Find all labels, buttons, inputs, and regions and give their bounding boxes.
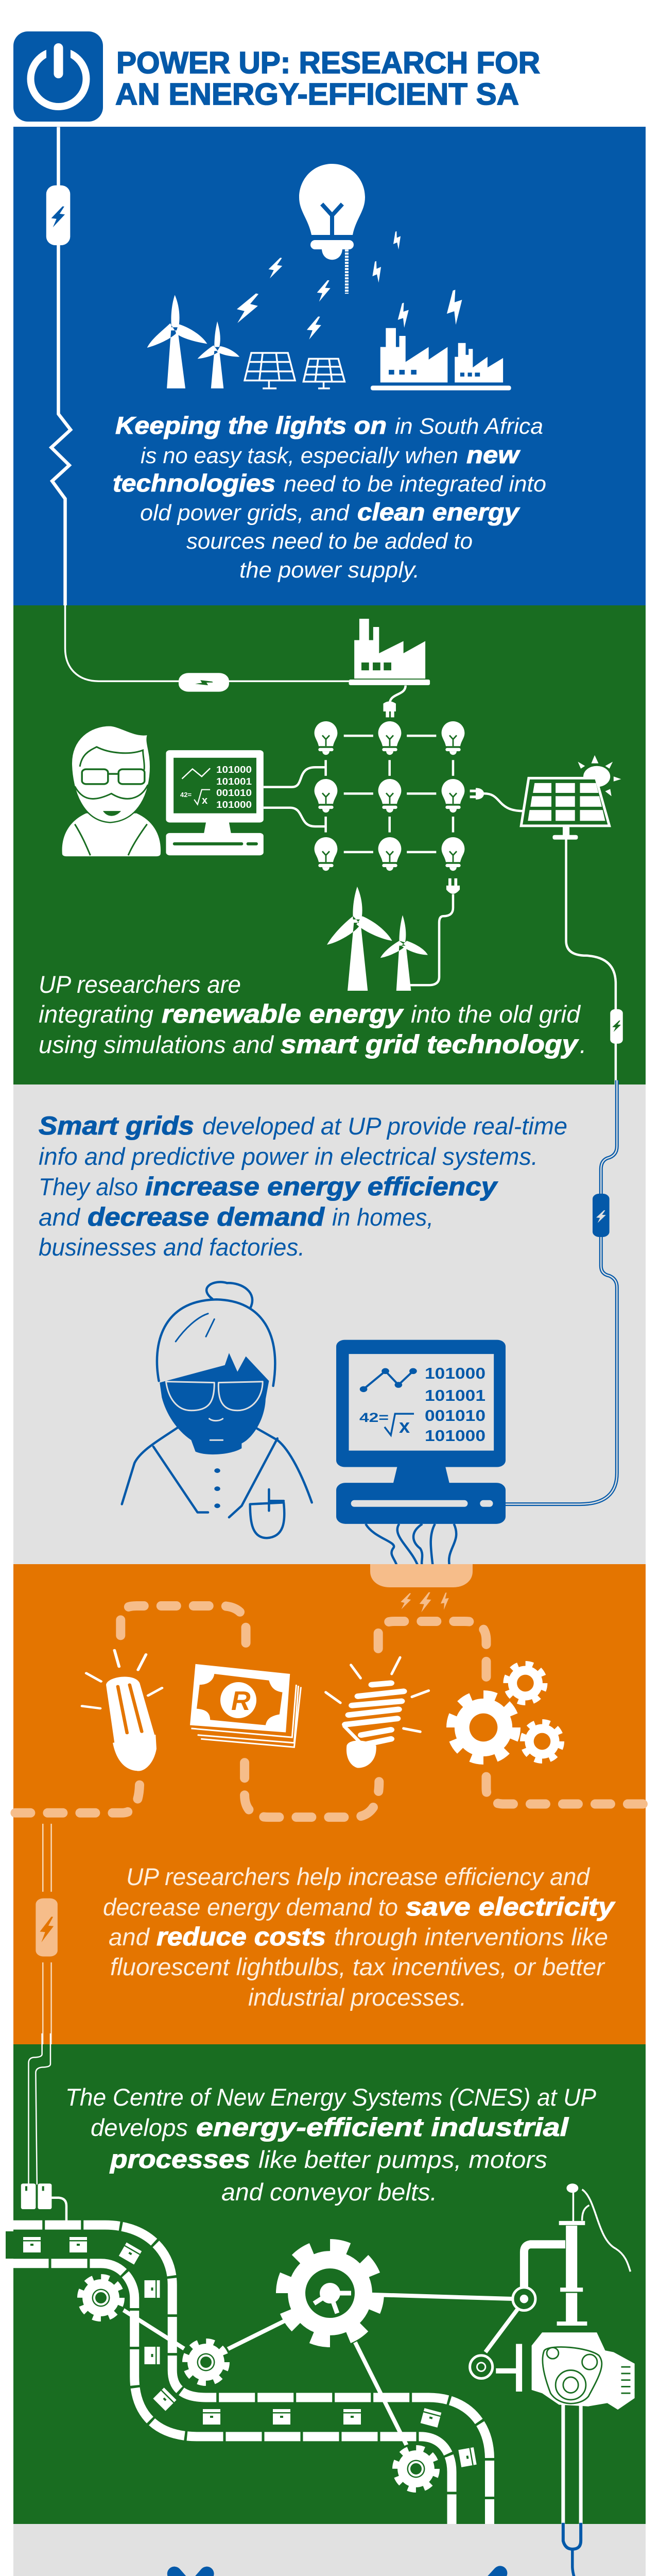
icon: woman researcher bbox=[122, 1282, 312, 1538]
title bbox=[115, 46, 540, 111]
text: smart grids: decrease demand bbox=[88, 1202, 325, 1231]
text: renewable energy: using simulations and bbox=[39, 1031, 274, 1058]
icon: energy sources feeding a lightbulb bbox=[147, 164, 511, 391]
computer screen readout bbox=[359, 1364, 485, 1445]
text: smart grids: in homes, bbox=[332, 1204, 433, 1231]
solar panels bbox=[245, 353, 344, 388]
icon: socket with sparks bbox=[370, 1564, 473, 1613]
text: smart grids: developed at UP provide real-time bbox=[202, 1112, 567, 1140]
text: keeping the lights on: need to be integrated into bbox=[284, 471, 546, 497]
icon: researcher bbox=[62, 725, 161, 856]
computer screen readout: 101001 bbox=[216, 776, 252, 787]
text: save electricity: through interventions like bbox=[334, 1923, 608, 1951]
text: industrial processes: The Centre of New Energy Systems (CNES) at UP bbox=[65, 2083, 597, 2111]
text: renewable energy: into the old grid bbox=[411, 1001, 581, 1028]
panel: efficient buildings bbox=[13, 2523, 646, 2576]
text: industrial processes: and conveyor belts. bbox=[221, 2178, 437, 2206]
icon: computer with wires bbox=[336, 1340, 506, 1567]
icon: cross bbox=[175, 2574, 207, 2576]
text: save electricity: industrial processes. bbox=[248, 1984, 466, 2011]
cable and plugs bbox=[21, 2033, 66, 2223]
panel: industrial processes bbox=[6, 2033, 646, 2527]
text: renewable energy: renewable energy bbox=[162, 999, 404, 1028]
text: renewable energy bbox=[39, 971, 586, 1059]
cable to factory bbox=[65, 601, 351, 681]
header bbox=[13, 31, 540, 122]
text: save electricity: reduce costs bbox=[157, 1922, 326, 1951]
computer screen readout: 42= bbox=[359, 1411, 389, 1425]
conveyor belt bbox=[6, 2225, 490, 2527]
icon: lightbulb bbox=[299, 164, 365, 260]
computer screen readout: 42= bbox=[180, 791, 192, 799]
icon: fluorescent bulb bbox=[82, 1650, 162, 1771]
computer screen readout: x bbox=[202, 795, 207, 806]
icon: spiral bulb bbox=[344, 1683, 404, 1768]
text: keeping the lights on: clean energy bbox=[357, 498, 521, 526]
text: industrial processes bbox=[65, 2083, 597, 2206]
text: keeping the lights on bbox=[113, 412, 546, 583]
text: save electricity: and bbox=[109, 1923, 150, 1951]
text: renewable energy: . bbox=[580, 1031, 586, 1058]
conveyor boxes bbox=[23, 2237, 477, 2467]
text: industrial processes: energy-efficient industrial bbox=[196, 2112, 569, 2142]
linkage rods bbox=[120, 2295, 521, 2447]
cable with switch bbox=[505, 1080, 617, 1504]
icon: computer bbox=[166, 750, 264, 855]
icon: grid of lightbulbs bbox=[315, 721, 464, 871]
text: keeping the lights on: sources need to be added to bbox=[186, 529, 473, 554]
text: save electricity: decrease energy demand to bbox=[103, 1893, 398, 1921]
computer screen readout: 001010 bbox=[216, 788, 252, 798]
icon: factory bbox=[349, 619, 430, 685]
text: keeping the lights on: old power grids, and bbox=[140, 500, 350, 526]
computer screen readout bbox=[180, 765, 252, 810]
title: POWER UP: RESEARCH FOR bbox=[116, 46, 540, 80]
icon: solar panel bbox=[521, 755, 621, 840]
plugs and grid links bbox=[264, 685, 616, 1086]
switch bbox=[610, 1009, 623, 1044]
text: keeping the lights on: in South Africa bbox=[395, 414, 543, 439]
icon: banknote rand symbol bbox=[220, 1682, 256, 1718]
icon: power button bbox=[13, 31, 103, 122]
text: save electricity: save electricity bbox=[406, 1892, 616, 1921]
text: keeping the lights on: technologies bbox=[113, 469, 275, 497]
text: keeping the lights on: is no easy task, especially when bbox=[141, 443, 458, 468]
icon: gears bbox=[451, 1664, 562, 1761]
panel: smart grids bbox=[13, 1080, 646, 1567]
text: renewable energy: UP researchers are bbox=[39, 971, 241, 998]
text: industrial processes: processes bbox=[109, 2144, 250, 2174]
icon: banknote rand symbol: R bbox=[231, 1686, 251, 1716]
green belt end bbox=[6, 2231, 14, 2259]
switch and double cable bbox=[36, 1824, 58, 2046]
icon: water pump bbox=[470, 2183, 635, 2527]
wind turbines bbox=[147, 295, 239, 388]
text: smart grids: They also bbox=[39, 1173, 138, 1200]
text: industrial processes: like better pumps, motors bbox=[258, 2146, 547, 2173]
conveyor gears bbox=[75, 2272, 442, 2495]
text: save electricity: UP researchers help increase efficiency and bbox=[126, 1863, 591, 1890]
factories bbox=[380, 328, 503, 382]
panel: saving electricity bbox=[13, 1564, 646, 2046]
title: AN ENERGY-EFFICIENT SA bbox=[115, 77, 519, 111]
text: save electricity: fluorescent lightbulbs, tax incentives, or better bbox=[110, 1953, 605, 1980]
text: smart grids: info and predictive power in electrical systems. bbox=[39, 1143, 538, 1170]
computer screen readout: 101000 bbox=[425, 1427, 485, 1445]
text: renewable energy: smart grid technology bbox=[281, 1029, 579, 1059]
text: keeping the lights on: Keeping the lights on bbox=[115, 412, 387, 439]
text: smart grids: businesses and factories. bbox=[39, 1233, 305, 1261]
icon: check mark bbox=[449, 2573, 500, 2576]
computer screen readout: x bbox=[399, 1416, 410, 1437]
panel: keeping the lights on bbox=[13, 127, 646, 607]
text: save electricity bbox=[103, 1863, 616, 2011]
text: keeping the lights on: the power supply. bbox=[239, 557, 420, 583]
text: smart grids: increase energy efficiency bbox=[145, 1172, 498, 1201]
spiral bulb rays bbox=[326, 1657, 429, 1732]
computer screen readout: 101000 bbox=[425, 1364, 485, 1382]
computer screen readout: 101000 bbox=[216, 800, 252, 810]
text: smart grids: Smart grids bbox=[39, 1111, 194, 1140]
text: keeping the lights on: new bbox=[466, 441, 521, 468]
text: smart grids bbox=[39, 1111, 567, 1261]
cable and switch bbox=[46, 127, 71, 607]
cable with switch bbox=[563, 2523, 626, 2576]
dashed energy path bbox=[15, 1606, 643, 1817]
text: smart grids: and bbox=[39, 1204, 81, 1231]
text: renewable energy: integrating bbox=[39, 1001, 153, 1028]
computer screen readout: 101001 bbox=[425, 1386, 485, 1404]
icon: large central gear bbox=[283, 2246, 377, 2341]
icon: wind turbines bbox=[327, 887, 428, 991]
computer screen readout: 001010 bbox=[425, 1406, 485, 1425]
smart grid diagram bbox=[62, 601, 623, 1086]
icon: banknotes bbox=[190, 1664, 301, 1747]
computer screen readout: 101000 bbox=[216, 765, 252, 775]
text: industrial processes: develops bbox=[91, 2114, 188, 2141]
panel: integrating renewable energy bbox=[13, 601, 646, 1086]
